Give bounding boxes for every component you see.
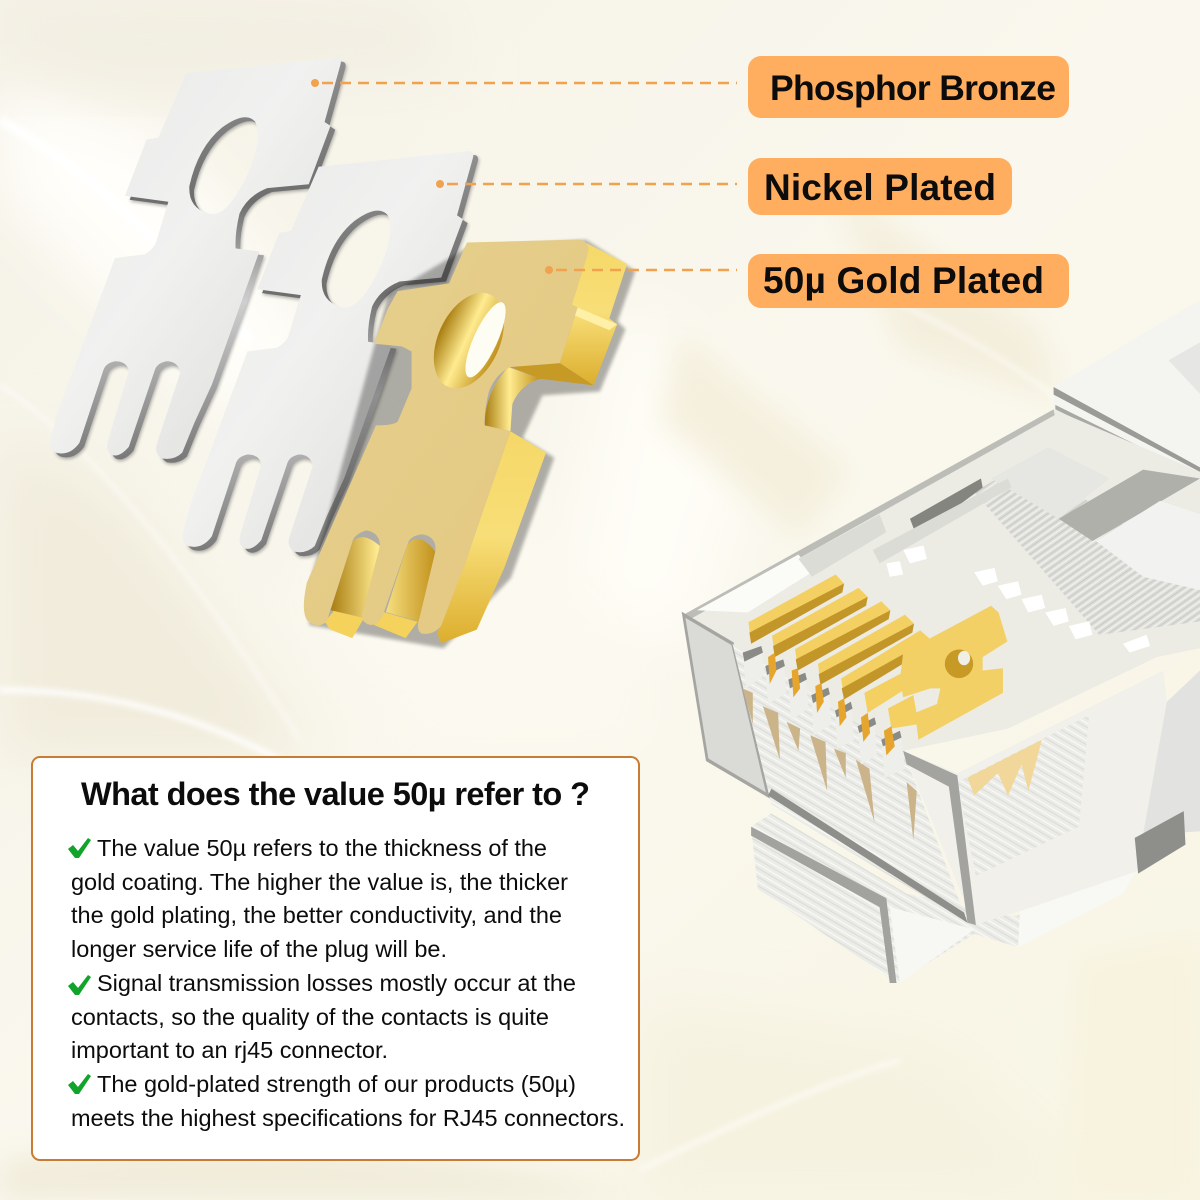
point 1 text	[71, 835, 568, 962]
heading: What does the value 50µ refer to ?	[81, 776, 590, 812]
point 3 text: The gold-plated strength of our products (50µ)	[97, 1071, 576, 1097]
label: Phosphor Bronze	[748, 56, 1069, 118]
label: 50µ Gold Plated: 50µ Gold Plated	[763, 260, 1044, 301]
leader: nickel plated	[436, 180, 737, 188]
clear plug left face	[684, 615, 768, 796]
clear latch	[751, 813, 1123, 983]
point 1 text: gold coating. The higher the value is, the thicker	[71, 869, 568, 895]
point 2 text: important to an rj45 connector.	[71, 1037, 388, 1063]
label: 50µ Gold Plated	[748, 254, 1069, 308]
point 3 text	[71, 1071, 625, 1131]
leader: gold plated	[545, 266, 737, 274]
clear plug underside with pins	[733, 644, 967, 923]
point 2 text	[71, 970, 576, 1063]
check icon 3	[68, 1074, 91, 1094]
check icon 2	[68, 975, 91, 995]
silver contact: nickel plated	[182, 151, 479, 558]
clear plug top face	[684, 409, 1200, 751]
label: Nickel Plated: Nickel Plated	[764, 167, 996, 208]
silver contact: phosphor bronze	[50, 58, 346, 464]
point 3 text: meets the highest specifications for RJ45 connectors.	[71, 1105, 625, 1131]
seven gold contacts	[743, 575, 930, 778]
check icon 1	[68, 838, 91, 858]
point 2 text: Signal transmission losses mostly occur at the	[97, 970, 576, 996]
point 2 text: contacts, so the quality of the contacts is quite	[71, 1004, 549, 1030]
connector plug	[684, 300, 1200, 983]
gold contact in plug	[900, 606, 1007, 740]
label: Phosphor Bronze: Phosphor Bronze	[770, 68, 1056, 108]
point 1 text: the gold plating, the better conductivity, and the	[71, 902, 562, 928]
label: Nickel Plated	[748, 158, 1012, 215]
point 1 text: longer service life of the plug will be.	[71, 936, 447, 962]
panel: what does 50µ refer to	[32, 757, 639, 1160]
cable jacket	[1054, 300, 1200, 479]
clear plug front right window	[903, 671, 1185, 947]
leader: phosphor bronze	[311, 79, 737, 87]
right grey cable end	[1079, 671, 1200, 854]
point 1 text: The value 50µ refers to the thickness of the	[97, 835, 547, 861]
gold contact: 50 micro gold plated	[304, 239, 635, 648]
